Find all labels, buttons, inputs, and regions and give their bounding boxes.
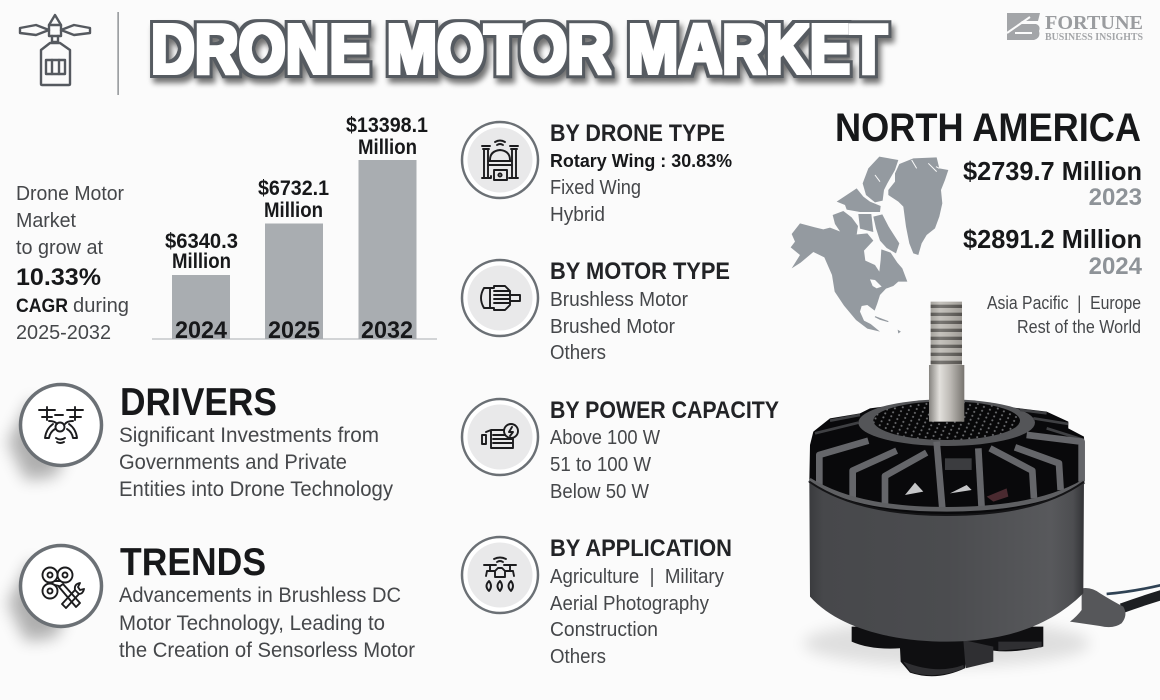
trends text: the Creation of Sensorless Motor [119, 639, 415, 662]
icon: drone and tools circle [8, 546, 102, 641]
rotor details [905, 458, 1008, 502]
icon: motor [462, 260, 538, 336]
panel: by application [462, 535, 732, 668]
map: North America [791, 157, 948, 333]
items: Rotary Wing : 30.83% [550, 151, 732, 171]
back fins [815, 410, 1084, 440]
CAGR text block [16, 183, 129, 344]
bar 2032: $13398.1 [346, 114, 428, 137]
items: Brushed Motor [550, 316, 675, 338]
bar 2025: Million [264, 199, 323, 222]
trends text: Motor Technology, Leading to [119, 612, 385, 635]
panel: by power capacity [462, 397, 779, 503]
bar 2024: $6340.3 [165, 230, 238, 253]
CAGR text block: 10.33% [16, 264, 101, 291]
stat 2024: 2024 [1089, 253, 1143, 280]
feet [852, 627, 1043, 676]
items: Aerial Photography [550, 593, 709, 615]
logo: Fortune Business Insights: FORTUNE [1045, 12, 1143, 34]
items: Above 100 W [550, 427, 660, 449]
heading: BY POWER CAPACITY [550, 397, 779, 424]
items: Others [550, 646, 606, 668]
icon: motor with bolt [462, 399, 538, 475]
CAGR text block: to grow at [16, 237, 103, 259]
bar 2024: 2024 [175, 317, 228, 344]
items: Hybrid [550, 204, 605, 226]
items: Brushless Motor [550, 289, 688, 311]
top plate [858, 399, 1035, 446]
trends text: Advancements in Brushless DC [119, 584, 401, 607]
icon: drone circle [8, 384, 102, 480]
panel: by motor type [462, 258, 730, 364]
other regions [987, 293, 1141, 337]
other regions: Rest of the World [1017, 317, 1141, 337]
heading: BY APPLICATION [550, 535, 732, 562]
stat 2023: 2023 [1089, 184, 1142, 211]
items: Fixed Wing [550, 177, 641, 199]
stat 2023 [963, 156, 1142, 211]
finned cap [809, 400, 1084, 517]
bar 2025 [258, 177, 329, 344]
icon: agricultural drone [462, 537, 538, 613]
panel: drivers [8, 381, 393, 501]
items: 51 to 100 W [550, 454, 651, 476]
heading: drivers: DRIVERS [120, 381, 277, 424]
panel: trends [8, 541, 415, 662]
thread [931, 302, 962, 365]
stat 2023: $2739.7 Million [963, 156, 1142, 186]
title: DRONE MOTOR MARKET [151, 10, 887, 88]
drivers text: Governments and Private [119, 451, 347, 474]
shaft [929, 365, 964, 422]
icon: satellite drone header [20, 15, 90, 85]
bar 2024 [165, 230, 238, 344]
bar 2032: 2032 [361, 317, 413, 344]
bar 2025: 2025 [268, 317, 320, 344]
CAGR text block: during [73, 295, 129, 317]
items [550, 151, 732, 226]
heading: BY MOTOR TYPE [550, 258, 730, 285]
items [550, 566, 724, 668]
items [550, 289, 688, 364]
bar 2032: Million [358, 136, 417, 159]
drivers text: Entities into Drone Technology [119, 478, 393, 501]
items: Agriculture | Military [550, 566, 724, 588]
panel: by drone type [462, 120, 732, 226]
floor shadow [803, 620, 1090, 667]
CAGR text block: 2025-2032 [16, 322, 111, 344]
items [550, 427, 660, 503]
items: Others [550, 342, 606, 364]
icon: drone with camera [462, 122, 538, 198]
CAGR text block: CAGR [16, 296, 68, 317]
body [809, 482, 1084, 642]
trends text [119, 584, 415, 662]
drivers text: Significant Investments from [119, 424, 379, 447]
logo: Fortune Business Insights [1007, 12, 1143, 43]
bar 2024: Million [172, 250, 231, 273]
other regions: Asia Pacific | Europe [987, 293, 1141, 313]
CAGR text block: Market [16, 210, 76, 232]
bar chart: market size [152, 114, 437, 344]
heading: trends: TRENDS [120, 541, 266, 584]
cable [1070, 585, 1160, 627]
motor image [803, 302, 1160, 676]
bar 2032 [346, 114, 428, 344]
logo: Fortune Business Insights: BUSINESS INSIGHTS [1045, 32, 1143, 43]
bar 2025: $6732.1 [258, 177, 329, 200]
items: Construction [550, 619, 658, 641]
heading: BY DRONE TYPE [550, 120, 725, 147]
panel: north america stats [835, 106, 1143, 337]
header divider [118, 12, 119, 95]
mesh [873, 401, 1020, 440]
stat 2024: $2891.2 Million [963, 224, 1142, 254]
CAGR text block: Drone Motor [16, 183, 124, 205]
drivers text [119, 424, 393, 501]
lower ring [809, 480, 1084, 509]
items: Below 50 W [550, 481, 649, 503]
stat 2024 [963, 224, 1143, 280]
seam [809, 482, 1084, 515]
ribs [819, 435, 1082, 508]
